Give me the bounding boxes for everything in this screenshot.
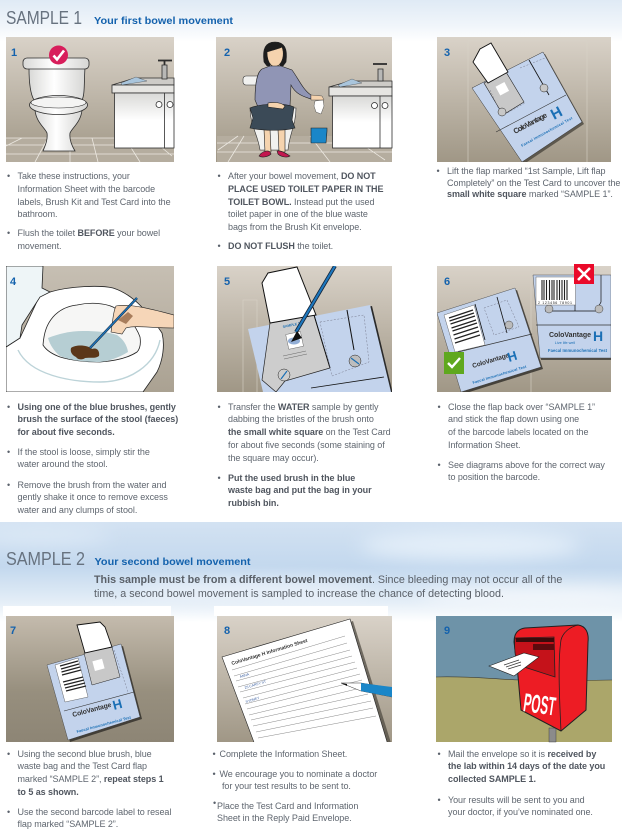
panel 8: information sheet and pen: [217, 616, 392, 745]
text: step 5 bullet 1: [218, 402, 391, 463]
lead text: sample 2 explanation: time, a second bowel movement is sampled to increase the chance of detecting blood.: [94, 588, 504, 600]
text: step 8 bullet 2: for your test results to be sent to.: [222, 781, 351, 791]
test card: [472, 43, 584, 164]
text: step 9 bullet 1: [438, 748, 605, 784]
test card: Faecal Immunochemical Test: [76, 714, 132, 734]
heading: sample 2: SAMPLE 2: [6, 548, 85, 569]
text: step 2 bullet 1: bags from the Brush Kit envelope.: [228, 222, 362, 232]
vanity: [329, 64, 392, 148]
text: step 3: Completely” on the Test Card to uncover the: [447, 178, 620, 188]
blue brush: [291, 266, 335, 342]
text: step 6 bullet 2: See diagrams above for the correct way: [448, 460, 605, 470]
text: step 6 bullet 1: of the barcode labels located on the: [448, 427, 588, 437]
right card: incorrect: H: [593, 328, 603, 344]
infographic page: •: [436, 166, 440, 176]
step number 4: 4: [10, 276, 17, 288]
vanity: [112, 60, 174, 148]
toilet: [23, 58, 89, 151]
step number 7: 7: [10, 625, 16, 637]
text: step 2 bullet 1: After your bowel movement, DO NOT: [228, 171, 376, 181]
text: step 1 bullet 1: bathroom.: [18, 209, 57, 219]
text: step 9 bullet 1: collected SAMPLE 1.: [448, 774, 536, 784]
text: step 6 bullet 1: [438, 402, 595, 450]
text: step 3: [436, 166, 620, 199]
text: step 5 bullet 1: Transfer the WATER sample by gently: [228, 402, 378, 412]
text: step 3: Lift the flap marked “1st Sample, Lift flap: [447, 166, 606, 176]
hand with used toilet paper: [311, 95, 324, 114]
text: step 8 bullet 3: [213, 798, 358, 823]
text: step 7 bullet 1: to 5 as shown.: [18, 787, 79, 797]
blue waste bag: [311, 128, 327, 143]
text: step 9 bullet 2: [438, 794, 593, 817]
text: step 1 bullet 2: Flush the toilet BEFORE your bowel: [18, 228, 160, 238]
panel 1: toilet and vanity: [6, 37, 174, 162]
text: step 2 bullet 1: toilet paper in one of the blue waste: [228, 209, 368, 219]
lead text: sample 2 explanation: This sample must be from a different bowel movement. Since bleeding may not occur all of the: [94, 574, 562, 586]
left card: correct: H: [505, 348, 519, 365]
text: step 7 bullet 1: Using the second blue brush, blue: [18, 748, 152, 758]
icon: pink check badge: [49, 46, 68, 64]
left card: correct: Faecal Immunochemical Test: [472, 365, 528, 385]
infographic page: •: [218, 240, 221, 250]
text: step 5 bullet 1: the square may occur).: [228, 453, 319, 463]
icon: green tick: [444, 352, 464, 374]
toilet behind woman: [243, 76, 296, 150]
text: step 1 bullet 2: [7, 228, 160, 251]
text: step 8 bullet 3: Place the Test Card and Information: [217, 800, 358, 810]
slot: [515, 637, 555, 677]
infographic page: •: [7, 480, 10, 490]
text: step 5 bullet 2: waste bag and put the bag in your: [228, 485, 372, 495]
panel 3: test card with lifted flap: [437, 37, 611, 164]
blue brush: [90, 298, 137, 348]
text: step 7 bullet 2: Use the second barcode label to reseal: [18, 806, 171, 816]
text: step 1 bullet 2: movement.: [18, 241, 61, 251]
test card: ColoVantage: [512, 110, 549, 136]
step number 9: 9: [444, 625, 450, 637]
text: step 4 bullet 3: water and any clumps of stool.: [18, 505, 137, 515]
infographic page: •: [7, 446, 10, 456]
infographic page: •: [213, 798, 216, 808]
right card: incorrect: 2 123456 78901: [538, 301, 572, 305]
text: step 7 bullet 2: flap marked “SAMPLE 2”.: [18, 819, 118, 829]
stool: [71, 345, 99, 359]
bowl opening with water: [43, 303, 140, 362]
infographic page: •: [7, 402, 10, 412]
step number 5: 5: [224, 276, 230, 288]
test card: H: [111, 696, 124, 713]
panel 7: second sample test card: [6, 616, 174, 742]
right card: incorrect: ColoVantage: [549, 332, 591, 339]
text: step 9 bullet 2: Your results will be sent to you and: [448, 794, 585, 804]
text: step 4 bullet 3: gently shake it once to remove excess: [18, 492, 168, 502]
infographic page: •: [212, 768, 216, 778]
woman: [250, 42, 311, 157]
right card: incorrect: [533, 275, 611, 360]
infographic page: •: [218, 171, 221, 181]
text: step 7 bullet 1: marked “SAMPLE 2”, repeat steps 1: [18, 774, 164, 784]
heading: sample 1: SAMPLE 1: [6, 7, 82, 28]
step number 3: 3: [444, 47, 450, 59]
text: step 4 bullet 3: Remove the brush from the water and: [18, 480, 166, 490]
test card: SAMPLE 1: [282, 321, 300, 329]
text: step 4 bullet 1: [7, 402, 178, 437]
text: step 4 bullet 1: brush the surface of the stool (faeces): [18, 414, 178, 424]
infographic page: •: [218, 402, 221, 412]
infographic page: •: [438, 794, 441, 804]
right card: incorrect: Faecal Immunochemical Test: [548, 348, 608, 353]
text: step 4 bullet 1: for about five seconds.: [18, 427, 115, 437]
post: [549, 728, 556, 742]
information sheet: 25 CAREY ST: [244, 679, 267, 690]
sky band: sample 1: [0, 0, 622, 42]
text: step 5 bullet 1: the small white square on the Test Card: [228, 427, 391, 437]
text: step 1 bullet 1: labels, Brush Kit and Test Card into the: [18, 197, 171, 207]
infographic page: •: [7, 748, 10, 758]
text: step 8 bullet 2: [212, 768, 378, 791]
infographic page: •: [7, 171, 10, 181]
panel 5: dabbing sample onto test card: [217, 266, 393, 394]
text: step 1 bullet 1: Information Sheet with the barcode: [18, 184, 155, 194]
infographic page: •: [438, 402, 441, 412]
text: step 6 bullet 2: [438, 460, 605, 482]
text: step 4 bullet 3: [7, 480, 168, 515]
pen: [341, 683, 392, 697]
text: step 1 bullet 1: Take these instructions, your: [18, 171, 130, 181]
text: step 2 bullet 1: [218, 171, 384, 232]
text: step 4 bullet 2: [7, 446, 150, 469]
text: step 3: small white square marked “SAMPLE 1”.: [447, 189, 613, 199]
text: step 8 bullet 3: Sheet in the Reply Paid Envelope.: [217, 813, 352, 823]
text: step 2 bullet 1: TOILET BOWL. Instead put the used: [228, 197, 374, 207]
sky band: sample 2: [0, 522, 622, 622]
text: step 7 bullet 2: [7, 806, 171, 829]
envelope: [489, 653, 539, 676]
step number 6: 6: [444, 276, 450, 288]
information sheet: ANNA: [239, 672, 250, 679]
text: step 6 bullet 2: to position the barcode.: [448, 472, 540, 482]
panel 6: correct and incorrect barcode position: [437, 266, 611, 394]
text: step 4 bullet 2: water around the stool.: [18, 459, 108, 469]
text: step 1 bullet 1: [7, 171, 171, 219]
text: step 9 bullet 2: your doctor, if you’ve nominated one.: [448, 807, 593, 817]
text: step 6 bullet 1: and stick the flap down using one: [448, 414, 579, 424]
text: step 7 bullet 1: [7, 748, 164, 797]
text: step 2 bullet 2: DO NOT FLUSH the toilet.: [228, 240, 333, 250]
test card: ColoVantage: [72, 702, 112, 719]
test card: [248, 267, 393, 394]
text: step 8 bullet 2: We encourage you to nominate a doctor: [220, 768, 377, 778]
text: step 5 bullet 2: [218, 472, 372, 508]
text: step 4 bullet 1: Using one of the blue brushes, gently: [18, 402, 176, 412]
subheading: sample 1: Your first bowel movement: [94, 15, 234, 27]
box body: [514, 625, 588, 731]
text: step 9 bullet 1: the lab within 14 days of the date you: [448, 761, 605, 771]
panel 9: red post box: [436, 616, 612, 742]
text: step 4 bullet 2: If the stool is loose, simply stir the: [18, 446, 150, 456]
infographic page: •: [438, 748, 441, 758]
information sheet: SYDNEY: [245, 696, 261, 704]
toilet seat: [6, 286, 163, 392]
text: step 6 bullet 1: Close the flap back over “SAMPLE 1”: [448, 402, 595, 412]
text: step 5 bullet 1: dabbing the bristles of the brush onto: [228, 414, 374, 424]
information sheet: [222, 619, 391, 745]
text: step 7 bullet 1: waste bag and the Test Card flap: [18, 761, 147, 771]
test card: [47, 622, 142, 742]
left card: correct: [437, 288, 543, 394]
text: step 5 bullet 2: Put the used brush in the blue: [228, 472, 355, 482]
infographic page: •: [212, 748, 216, 758]
white strips behind panels 7 and 8: [3, 606, 388, 616]
panel 2: woman seated on toilet: [216, 37, 392, 162]
infographic page: •: [218, 472, 221, 482]
icon: red cross: [574, 264, 594, 284]
infographic page: •: [7, 806, 10, 816]
lead text: sample 2 explanation: [94, 574, 562, 600]
infographic page: •: [7, 228, 10, 238]
right card: incorrect: Live life well: [555, 341, 575, 345]
panel 9: red post box: POST: [522, 687, 558, 721]
test card: H: [548, 103, 565, 124]
text: step 6 bullet 1: Information Sheet.: [448, 440, 520, 450]
left card: correct: ColoVantage: [472, 352, 510, 370]
panel 4: brushing stool in toilet bowl: [6, 266, 174, 392]
step number 8: 8: [224, 625, 230, 637]
text: step 5 bullet 2: rubbish bin.: [228, 498, 279, 508]
subheading: sample 2: Your second bowel movement: [94, 556, 251, 568]
text: step 5 bullet 1: for about five seconds (some staining of: [228, 440, 385, 450]
toilet lid: [6, 266, 50, 347]
step number 1: 1: [11, 47, 17, 59]
test card: Faecal Immunochemical Test: [521, 116, 574, 148]
infographic page: •: [438, 460, 441, 470]
text: step 9 bullet 1: Mail the envelope so it is received by: [448, 748, 596, 758]
information sheet: ColoVantage H Information Sheet: [231, 638, 309, 667]
hand holding brush: [111, 305, 174, 334]
step number 2: 2: [224, 47, 230, 59]
text: step 2 bullet 1: PLACE USED TOILET PAPER IN THE: [228, 184, 383, 194]
text: step 8 bullet 1: Complete the Information Sheet.: [220, 748, 347, 758]
